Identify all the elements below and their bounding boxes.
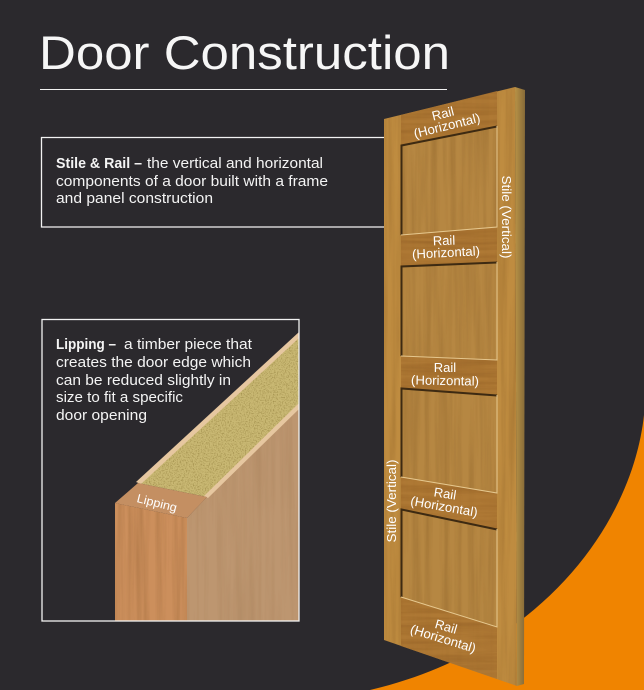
door illustration xyxy=(384,87,525,687)
panel shadows and highlights xyxy=(401,126,497,627)
rail and stile labels: Rail xyxy=(433,484,457,503)
rail and stile labels xyxy=(384,104,514,656)
rail and stile labels: Rail xyxy=(433,233,456,248)
stile and rail description: components of a door built with a frame xyxy=(56,174,328,190)
rail and stile labels: Rail xyxy=(433,616,459,637)
rail and stile labels: (Horizontal) xyxy=(408,621,478,656)
rail and stile labels: Stile (Vertical) xyxy=(384,460,399,542)
panel frame xyxy=(42,320,299,621)
stile and rail description: and panel construction xyxy=(56,191,213,207)
door rails xyxy=(401,90,497,680)
rail and stile labels: Rail xyxy=(434,360,456,375)
door face xyxy=(384,87,517,686)
rail and stile labels: (Horizontal) xyxy=(409,493,479,520)
lipping description: can be reduced slightly in xyxy=(56,373,231,389)
rail and stile labels: (Horizontal) xyxy=(411,372,479,389)
lipping description: Lipping – xyxy=(56,337,116,353)
door panels xyxy=(401,120,497,630)
lipping description: size to fit a specific xyxy=(56,390,183,406)
door edge xyxy=(515,87,525,686)
panel frame xyxy=(42,138,384,227)
rail and stile labels: (Horizontal) xyxy=(412,110,482,141)
rail and stile labels: Rail xyxy=(430,104,456,124)
lipping block illustration xyxy=(115,332,299,621)
orange corner shape xyxy=(370,415,644,690)
rail and stile labels: Stile (Vertical) xyxy=(499,176,514,258)
title rule xyxy=(40,89,447,90)
lipping description xyxy=(56,337,252,424)
rail and stile labels: (Horizontal) xyxy=(412,243,480,262)
stile and rail description xyxy=(56,156,328,207)
lipping label: Lipping xyxy=(135,491,179,515)
lipping description: door opening xyxy=(56,408,147,424)
stile and rail description: Stile & Rail – xyxy=(56,156,142,172)
panel: stile and rail xyxy=(42,138,384,227)
lipping description: a timber piece that xyxy=(124,337,252,353)
lipping description: creates the door edge which xyxy=(56,355,251,371)
stile and rail description: the vertical and horizontal xyxy=(147,156,323,172)
title: Door Construction xyxy=(39,26,450,79)
panel: lipping xyxy=(42,320,299,621)
